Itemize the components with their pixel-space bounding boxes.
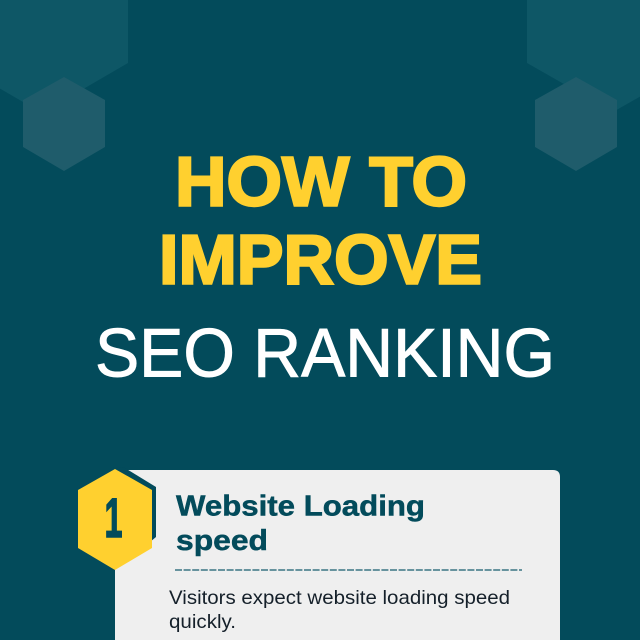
card background [115,470,560,640]
step description: quickly. [169,611,236,633]
title: IMPROVE [159,220,482,298]
panel: step 1 [78,467,560,640]
decorative hexagons, top left [0,0,128,171]
step description [169,587,510,633]
title: HOW TO [175,142,467,220]
dashed divider [175,569,522,571]
step heading: Website Loading [176,490,425,522]
icon: number hexagon: 1 [104,486,122,549]
decorative hexagons, top right [527,0,640,171]
step description: Visitors expect website loading speed [169,587,510,609]
title [95,142,555,392]
step heading [176,490,425,557]
title: SEO RANKING [95,314,555,392]
step heading: speed [176,525,268,557]
icon: number hexagon [78,467,156,570]
